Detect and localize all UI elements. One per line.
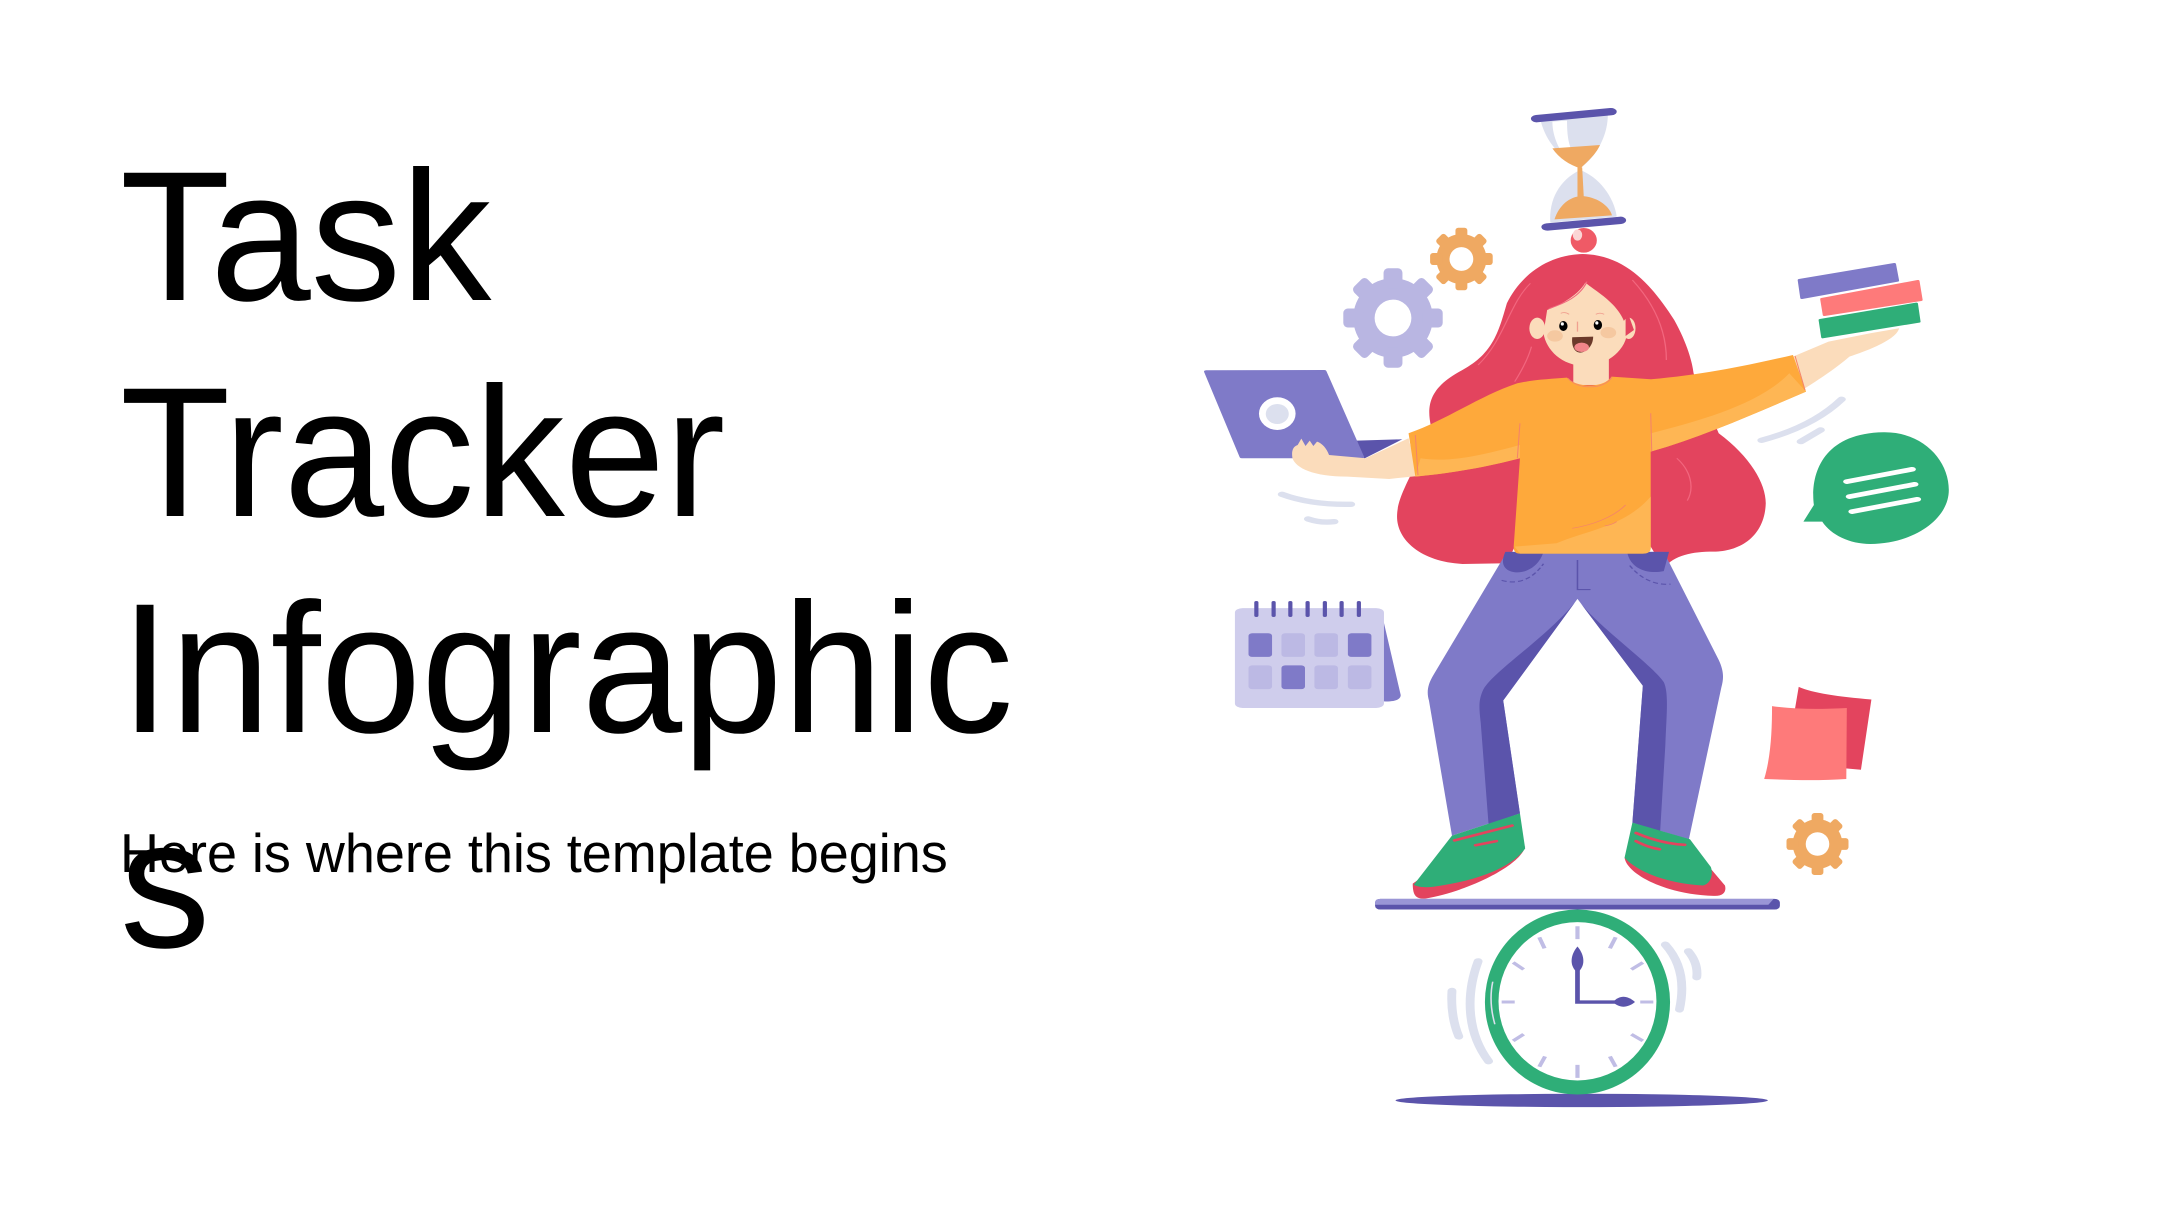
title: Tracker xyxy=(120,350,725,556)
icon: orange gear xyxy=(1430,228,1493,290)
shoes xyxy=(1413,813,1725,899)
subtitle: Here is where this template begins xyxy=(120,823,948,884)
shirt xyxy=(1409,355,1806,554)
icon: sticky notes xyxy=(1764,687,1871,780)
title: s xyxy=(120,781,210,987)
icon: speech bubble xyxy=(1803,432,1949,544)
icon: clock xyxy=(1485,910,1670,1095)
icon: hourglass xyxy=(1537,112,1620,227)
title: Infographic xyxy=(120,566,1013,772)
icon: laptop xyxy=(1206,371,1402,459)
arms and hands xyxy=(1292,328,1899,479)
icon: large lavender gear xyxy=(1343,268,1443,368)
floor shadow xyxy=(1395,1094,1768,1107)
legs: jeans xyxy=(1428,552,1723,839)
title: Task xyxy=(120,134,491,340)
balance board xyxy=(1375,899,1780,910)
icon: red ball xyxy=(1571,228,1597,253)
neck and face xyxy=(1529,282,1636,385)
clock vibration lines xyxy=(1452,945,1697,1061)
icon: calendar xyxy=(1235,603,1401,708)
hair xyxy=(1397,254,1766,568)
motion lines xyxy=(1282,399,1842,522)
icon: small orange gear xyxy=(1786,813,1848,875)
icon: stack of books xyxy=(1799,264,1921,337)
title xyxy=(120,134,1013,987)
